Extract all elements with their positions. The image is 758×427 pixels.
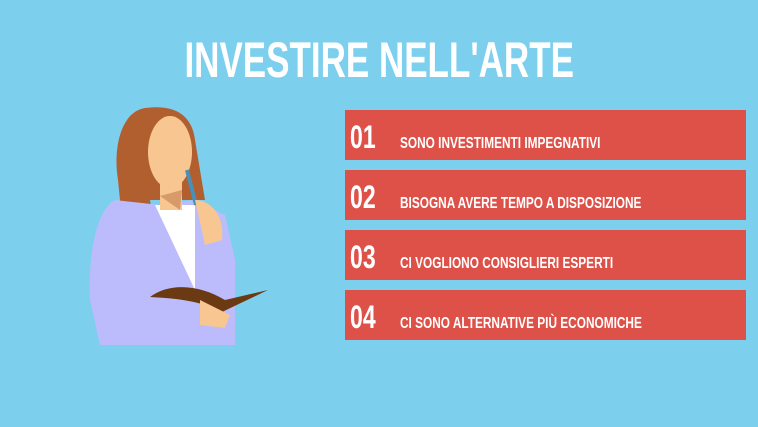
item 03	[345, 230, 746, 280]
item 01	[345, 110, 746, 160]
item 02: BISOGNA AVERE TEMPO A DISPOSIZIONE	[400, 195, 641, 212]
item 01: 01	[350, 119, 376, 155]
item 04: 04	[350, 299, 376, 335]
item 01: SONO INVESTIMENTI IMPEGNATIVI	[400, 135, 600, 152]
item 02: 02	[350, 179, 376, 215]
item 03: 03	[350, 239, 376, 275]
item 03: CI VOGLIONO CONSIGLIERI ESPERTI	[400, 255, 613, 272]
title: INVESTIRE NELL'ARTE	[184, 32, 574, 88]
item 04	[345, 290, 746, 340]
item 04: CI SONO ALTERNATIVE PIÙ ECONOMICHE	[400, 315, 642, 332]
item 02	[345, 170, 746, 220]
